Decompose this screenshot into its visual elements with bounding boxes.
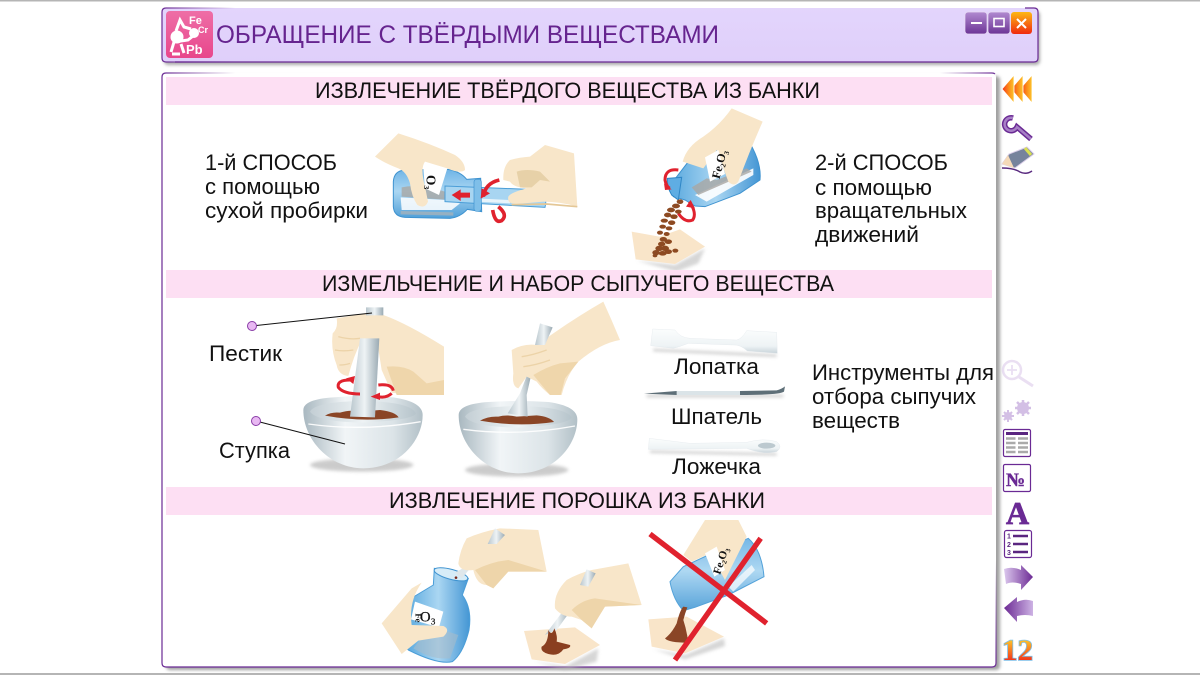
- label: mortar: Ступка: [219, 438, 291, 463]
- icon: pencil: [1002, 147, 1034, 173]
- icon: numbered list: 3: [1007, 550, 1011, 557]
- illustration: powder taken with spatula: Fe: [414, 613, 424, 623]
- label: spatula: Шпатель: [671, 404, 762, 429]
- section 2 heading: [166, 270, 992, 298]
- text: tools description: веществ: [812, 408, 900, 433]
- icon: chemistry flasks: [166, 11, 213, 58]
- section 1 heading: ИЗВЛЕЧЕНИЕ ТВЁРДОГО ВЕЩЕСТВА ИЗ БАНКИ: [315, 78, 820, 103]
- icon: number sign: [1004, 464, 1030, 492]
- illustration: bottle and dry test tube: [375, 133, 577, 221]
- icon: chemistry flasks: Fe: [189, 15, 202, 27]
- red rotation arrow: [483, 180, 504, 221]
- illustration: incorrect pouring, crossed out: [648, 520, 767, 660]
- main panel: [162, 73, 1000, 670]
- hand: [332, 313, 444, 395]
- spatula upper: [535, 323, 553, 345]
- icon: letter A: A: [1006, 495, 1029, 531]
- powder grains: [652, 199, 683, 257]
- icon: numbered list: 2: [1007, 542, 1011, 549]
- text: tools description: [812, 360, 994, 433]
- text: method 1: с помощью: [205, 174, 320, 199]
- red arrows: [665, 170, 694, 221]
- illustration: bottle with rotating motion: [632, 108, 763, 272]
- hand: holding test tube: [503, 145, 577, 207]
- icon: number sign: №: [1006, 470, 1025, 491]
- section 3 heading: ИЗВЛЕЧЕНИЕ ПОРОШКА ИЗ БАНКИ: [389, 488, 765, 513]
- illustration: powder taken with spatula: O₃: [420, 610, 436, 626]
- illustration: powder taken with spatula: [382, 528, 547, 662]
- icon: gears: [1002, 400, 1031, 422]
- paper sheet: [632, 229, 705, 264]
- text: method 2: 2-й СПОСОБ: [815, 150, 948, 175]
- section 1 heading: [166, 77, 992, 105]
- text: tools description: Инструменты для: [812, 360, 994, 385]
- spatula lower: [508, 376, 531, 417]
- icon: back arrow: [1004, 597, 1033, 622]
- icon: chemistry flasks: Pb: [186, 42, 203, 57]
- text: method 2: движений: [815, 222, 919, 247]
- tool: narrow spatula: [677, 391, 740, 395]
- section 2 heading: ИЗМЕЛЬЧЕНИЕ И НАБОР СЫПУЧЕГО ВЕЩЕСТВА: [322, 271, 834, 296]
- hand: [512, 302, 620, 395]
- pointers: [248, 313, 372, 444]
- icon: wrench: [1005, 118, 1031, 139]
- section 3 heading: [166, 487, 992, 515]
- illustration: incorrect pouring, crossed out: Fe₂O₃: [711, 545, 732, 576]
- title bar: [162, 8, 1040, 65]
- text: method 1: [205, 150, 368, 223]
- hand: [683, 108, 763, 184]
- text: tools description: отбора сыпучих: [812, 384, 976, 409]
- icon: chemistry flasks: Cr: [198, 25, 208, 35]
- hand: [458, 528, 547, 588]
- window buttons: [965, 12, 1032, 34]
- text: method 1: 1-й СПОСОБ: [205, 150, 337, 175]
- text: method 2: с помощью: [815, 175, 932, 200]
- icon: numbered list: 1: [1007, 534, 1011, 540]
- icon: numbered list: [1004, 530, 1032, 558]
- title: ОБРАЩЕНИЕ С ТВЁРДЫМИ ВЕЩЕСТВАМИ: [216, 21, 719, 49]
- hand: holding bottle: [375, 133, 465, 207]
- toolbar icons: [1002, 75, 1034, 667]
- pestle: [350, 338, 379, 417]
- label: pestle: Пестик: [209, 341, 282, 366]
- text: method 2: [815, 150, 967, 247]
- tools: [644, 329, 785, 454]
- tool: scoop spatula: [651, 329, 777, 353]
- red arrows: [338, 380, 393, 397]
- icon: forward arrow: [1004, 565, 1033, 590]
- hand: [382, 583, 447, 654]
- text: method 1: сухой пробирки: [205, 198, 368, 223]
- label: scoop: Лопатка: [674, 354, 760, 379]
- illustration: bottle with rotating motion: Fe₂O₃: [709, 148, 730, 180]
- text: method 2: вращательных: [815, 198, 967, 223]
- label: spoon: Ложечка: [672, 454, 762, 479]
- illustration: bottle and dry test tube: O₃: [424, 175, 439, 189]
- icon: page number: 12: [1002, 634, 1033, 667]
- illustration: powder on paper: [524, 563, 642, 670]
- icon: magnifier: [1003, 361, 1033, 386]
- icon: rewind arrows: [1002, 75, 1032, 103]
- illustration: mortar and pestle: [303, 302, 620, 477]
- red cross: [650, 534, 767, 660]
- second mortar: [465, 463, 568, 477]
- icon: table: [1004, 430, 1030, 456]
- tool: spoon: [648, 438, 780, 453]
